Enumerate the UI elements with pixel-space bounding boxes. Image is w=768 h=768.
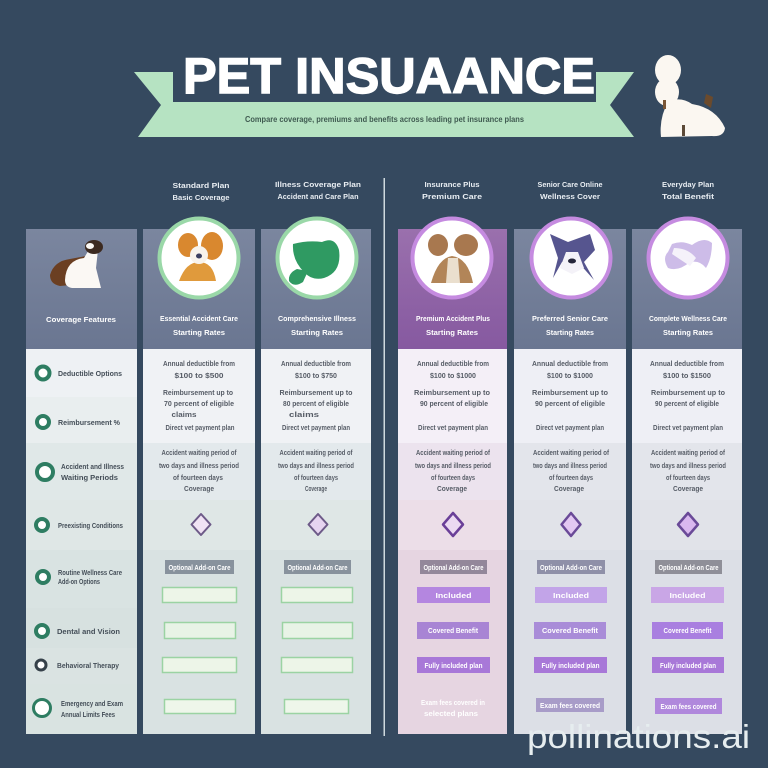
tag: grey: Optional Add-on Care	[658, 565, 719, 572]
bar: green	[164, 622, 236, 638]
bar: purple	[534, 657, 607, 673]
banner ribbon	[134, 72, 634, 137]
cell text: deductible and reimbursement: Reimbursement up to	[414, 390, 490, 397]
bar: purple: Fully included plan	[424, 663, 482, 670]
subtitle: Compare coverage, premiums and benefits across leading pet insurance plans	[245, 115, 525, 124]
cell text: waiting periods: of fourteen days	[173, 475, 223, 482]
tag: grey	[420, 560, 487, 574]
tag: grey	[165, 560, 234, 574]
cell text: waiting periods: Accident waiting period of	[280, 450, 353, 457]
bar: purple: Included	[553, 593, 589, 600]
icon: diamond	[562, 513, 580, 536]
row 4: Preexisting Conditions	[58, 521, 123, 530]
cell text: waiting periods: Accident waiting period of	[533, 450, 610, 457]
header cell	[261, 229, 371, 349]
row 2	[37, 416, 120, 428]
row backgrounds	[261, 349, 371, 734]
row 7	[36, 660, 120, 670]
cell text: waiting periods: Accident waiting period of	[162, 450, 237, 457]
cell text: deductible and reimbursement: 70 percent of eligible	[164, 401, 234, 408]
row 8	[34, 699, 123, 719]
bar: green	[162, 588, 236, 602]
bar: purple: Exam fees covered	[660, 704, 716, 711]
heading: Premium Accident Plus	[416, 314, 490, 323]
cell text: waiting periods: Accident waiting period of	[416, 450, 491, 457]
cell text: deductible and reimbursement: Annual deductible from	[650, 361, 724, 368]
icon: purple dog badge	[532, 218, 610, 298]
title: PET INSUAANCE	[183, 48, 595, 104]
bar: purple	[534, 622, 606, 639]
row 7: Behavioral Therapy	[57, 661, 120, 670]
cell text: waiting periods: two days and illness period	[533, 463, 607, 470]
bar: purple: Included	[670, 593, 706, 600]
row 3: Accident and Illness	[61, 462, 124, 471]
plan heading 1: Basic Coverage	[172, 193, 230, 202]
tag: white text: selected plans	[424, 711, 478, 718]
heading: features: Coverage Features	[46, 315, 116, 324]
heading: Starting Rates	[546, 328, 594, 337]
icon: diamond	[678, 513, 698, 536]
bar: purple: Fully included plan	[660, 663, 716, 670]
plan heading 5: Total Benefit	[662, 192, 715, 201]
cell text: deductible and reimbursement: 90 percent of eligible	[420, 401, 488, 408]
header cell	[398, 229, 507, 349]
cell text: deductible and reimbursement: Reimbursement up to	[163, 390, 233, 397]
bar: purple: Included	[436, 593, 472, 600]
bar: purple	[655, 698, 722, 714]
cell text: deductible and reimbursement: Direct vet payment plan	[536, 425, 604, 432]
header cell	[143, 229, 255, 349]
feature rows	[34, 366, 124, 719]
cell text: deductible and reimbursement: 80 percent of eligible	[283, 401, 349, 408]
header cell	[632, 229, 742, 349]
header cell	[26, 229, 137, 349]
row backgrounds	[398, 349, 507, 734]
cell text: deductible and reimbursement: claims	[172, 412, 197, 419]
cell text: deductible and reimbursement: Annual deductible from	[417, 361, 489, 368]
tag: grey: Optional Add-on Care	[540, 565, 602, 572]
cell text: deductible and reimbursement: 90 percent of eligible	[655, 401, 719, 408]
tag: grey	[284, 560, 351, 574]
bar: green	[282, 658, 352, 672]
cell text: deductible and reimbursement: $100 to $1000	[430, 373, 476, 380]
cell text: waiting periods: of fourteen days	[431, 475, 475, 482]
bar: purple	[417, 622, 489, 639]
cell text: deductible and reimbursement: Direct vet payment plan	[418, 425, 488, 432]
cell text: waiting periods: Coverage	[554, 486, 584, 493]
cell text: deductible and reimbursement: Reimbursement up to	[532, 390, 608, 397]
cell text: deductible and reimbursement: Direct vet payment plan	[282, 425, 350, 432]
bar: purple: Covered Benefit	[542, 628, 599, 635]
icon: white dog	[655, 55, 725, 137]
tag: grey: Optional Add-on Care	[288, 565, 348, 572]
row 5: Add-on Options	[58, 577, 100, 586]
cell text: waiting periods: of fourteen days	[666, 475, 710, 482]
tag: grey: Optional Add-on Care	[168, 565, 231, 572]
row 2: Reimbursement %	[58, 418, 120, 427]
bar: purple	[652, 622, 723, 639]
icon: diamond	[443, 513, 463, 536]
cell text: deductible and reimbursement: Direct vet payment plan	[653, 425, 723, 432]
row backgrounds	[26, 349, 137, 734]
panel: feature labels	[26, 229, 137, 734]
cell text: deductible and reimbursement: $100 to $1500	[663, 373, 711, 380]
cell text: deductible and reimbursement: Direct vet payment plan	[166, 425, 234, 432]
watermark: pollinations.ai	[527, 718, 750, 755]
panel: plan 3	[398, 218, 507, 734]
heading: Starting Rates	[426, 328, 478, 337]
row 5: Routine Wellness Care	[58, 568, 122, 577]
plan heading 4: Wellness Cover	[540, 192, 600, 201]
cell text: deductible and reimbursement: Annual deductible from	[281, 361, 351, 368]
cell text: deductible and reimbursement: Annual deductible from	[532, 361, 608, 368]
panel: plan 5	[632, 218, 742, 734]
cell text: waiting periods: of fourteen days	[294, 475, 338, 482]
row 5	[37, 568, 122, 586]
row 6: Dental and Vision	[57, 627, 120, 636]
row backgrounds	[632, 349, 742, 734]
plan heading 3: Insurance Plus	[424, 180, 480, 189]
cell text: waiting periods: Coverage	[437, 486, 467, 493]
bar: green	[282, 588, 352, 602]
icon: diamond	[192, 514, 210, 535]
icon: orange dog badge	[160, 218, 238, 298]
cell text: waiting periods: two days and illness period	[650, 463, 726, 470]
bar: purple	[652, 657, 724, 673]
plan heading 4: Senior Care Online	[538, 180, 602, 189]
heading: Comprehensive Illness	[278, 314, 356, 323]
row 1: Deductible Options	[58, 369, 122, 378]
bar: purple	[417, 587, 490, 603]
row 4	[36, 519, 123, 531]
heading: Complete Wellness Care	[649, 314, 727, 323]
tag: white text: Exam fees covered in	[421, 700, 485, 707]
plan heading 1: Standard Plan	[172, 181, 230, 190]
bar: green	[282, 622, 352, 638]
heading: Preferred Senior Care	[532, 314, 608, 323]
plan heading 5: Everyday Plan	[662, 180, 714, 189]
cell text: deductible and reimbursement: $100 to $500	[174, 373, 224, 380]
plan heading 2: Accident and Care Plan	[278, 192, 359, 201]
panel: plan 1	[143, 218, 255, 734]
row backgrounds	[514, 349, 626, 734]
tag: mixed: Exam fees covered	[540, 703, 600, 710]
column headers	[172, 180, 715, 202]
row 3: Waiting Periods	[61, 473, 118, 482]
cell text: waiting periods: Accident waiting period of	[651, 450, 726, 457]
bar: green	[164, 700, 236, 714]
plan heading 3: Premium Care	[422, 192, 482, 201]
header cell	[514, 229, 626, 349]
panel: plan 2	[261, 218, 371, 734]
cell text: deductible and reimbursement: claims	[289, 412, 319, 419]
cell text: deductible and reimbursement: 90 percent of eligible	[535, 401, 605, 408]
cell text: deductible and reimbursement: $100 to $750	[295, 373, 337, 380]
divider	[384, 178, 385, 736]
cell text: deductible and reimbursement: $100 to $1000	[547, 373, 593, 380]
row 8: Annual Limits Fees	[61, 710, 115, 719]
row 6	[36, 625, 120, 637]
cell text: deductible and reimbursement: Annual deductible from	[163, 361, 235, 368]
bar: purple: Covered Benefit	[664, 628, 712, 635]
bar: green	[162, 658, 236, 672]
tag: grey: Optional Add-on Care	[424, 565, 484, 572]
cell text: waiting periods: Coverage	[184, 486, 214, 493]
bar: purple	[651, 587, 724, 603]
row backgrounds	[143, 349, 255, 734]
icon: diamond	[308, 514, 328, 535]
icon: purple bone badge	[648, 218, 728, 298]
bar: green	[284, 700, 348, 714]
cell text: waiting periods: two days and illness period	[159, 463, 239, 470]
tag: mixed	[536, 698, 604, 712]
icon: green shape badge	[278, 218, 356, 298]
heading: Starting Rates	[663, 328, 713, 337]
bar: purple	[417, 657, 490, 673]
cell text: waiting periods: Coverage	[673, 486, 703, 493]
cell text: waiting periods: Coverage	[305, 486, 327, 493]
heading: Essential Accident Care	[160, 314, 238, 323]
row 8: Emergency and Exam	[61, 699, 123, 708]
bar: purple: Covered Benefit	[428, 628, 479, 635]
heading: Starting Rates	[173, 328, 225, 337]
cell text: deductible and reimbursement: Reimbursement up to	[651, 390, 725, 397]
row 1	[36, 366, 122, 380]
cell text: waiting periods: of fourteen days	[549, 475, 593, 482]
bar: purple	[535, 587, 607, 603]
tag: grey	[655, 560, 722, 574]
cell text: waiting periods: two days and illness period	[415, 463, 491, 470]
icon: brown and white dog	[50, 240, 103, 288]
cell text: waiting periods: two days and illness period	[278, 463, 354, 470]
tag: grey	[537, 560, 605, 574]
cell text: deductible and reimbursement: Reimbursement up to	[280, 390, 352, 397]
bar: purple: Fully included plan	[542, 663, 600, 670]
icon: brown dog badge	[412, 218, 492, 298]
row 3	[37, 462, 124, 482]
heading: Starting Rates	[291, 328, 343, 337]
panel: plan 4	[514, 218, 626, 734]
plan heading 2: Illness Coverage Plan	[275, 180, 361, 189]
